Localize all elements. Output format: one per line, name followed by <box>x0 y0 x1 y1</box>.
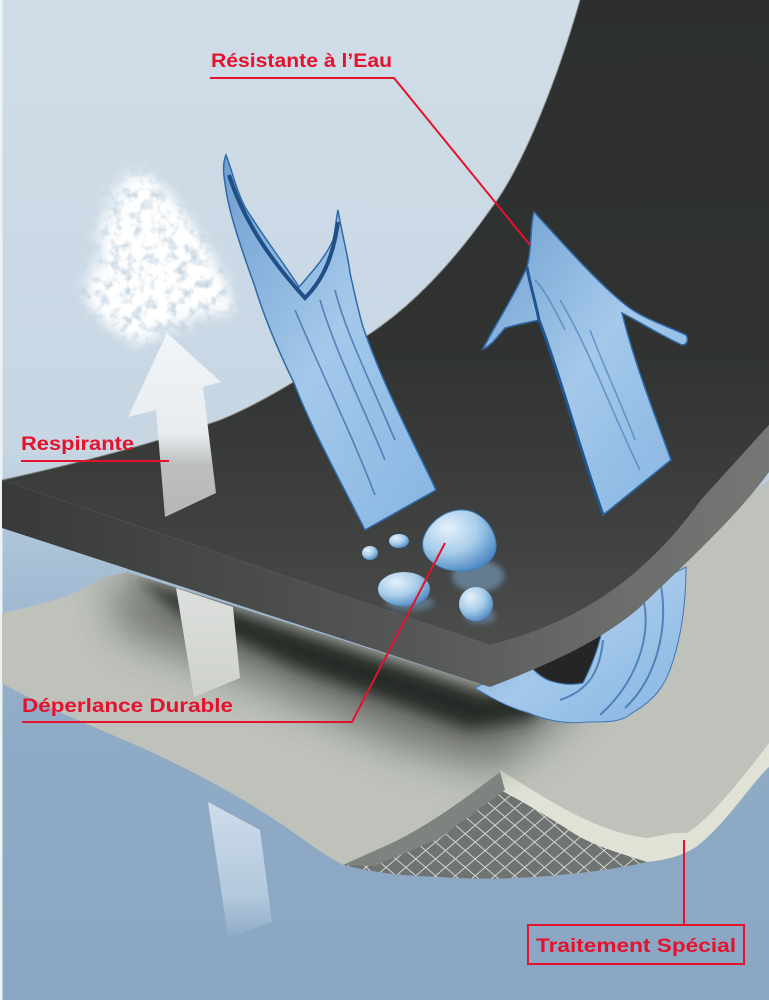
icon: faded air arrow below fabric <box>208 802 272 937</box>
icon: water splash arrow pointing up <box>483 212 687 515</box>
label: Résistante à l'Eau: Résistante à l’Eau <box>211 51 392 72</box>
icon: water loop under the fabric <box>475 567 686 723</box>
icon: vapour cloud <box>86 172 232 339</box>
top surface <box>2 0 769 645</box>
label: Déperlance Durable: Déperlance Durable <box>22 696 233 717</box>
label: Traitement Spécial <box>528 840 744 964</box>
label: Résistante à l'Eau <box>210 51 530 245</box>
white edge of lining <box>500 743 769 862</box>
panel: lower mesh layer <box>2 480 769 879</box>
icon: water splash arrow pointing down <box>224 155 436 530</box>
mesh backing <box>343 785 647 879</box>
grey lining surface <box>2 480 769 865</box>
icon: white breathability arrow <box>128 333 221 517</box>
front edge <box>2 425 769 687</box>
label: Respirante: Respirante <box>21 434 134 455</box>
shadow under dark layer <box>110 575 620 866</box>
label: Traitement Spécial: Traitement Spécial <box>536 936 736 957</box>
label: Déperlance Durable <box>22 543 445 722</box>
panel: dark water-resistant layer <box>2 0 769 687</box>
icon: air arrow between layers <box>176 588 240 697</box>
icon: water droplets <box>362 510 504 624</box>
